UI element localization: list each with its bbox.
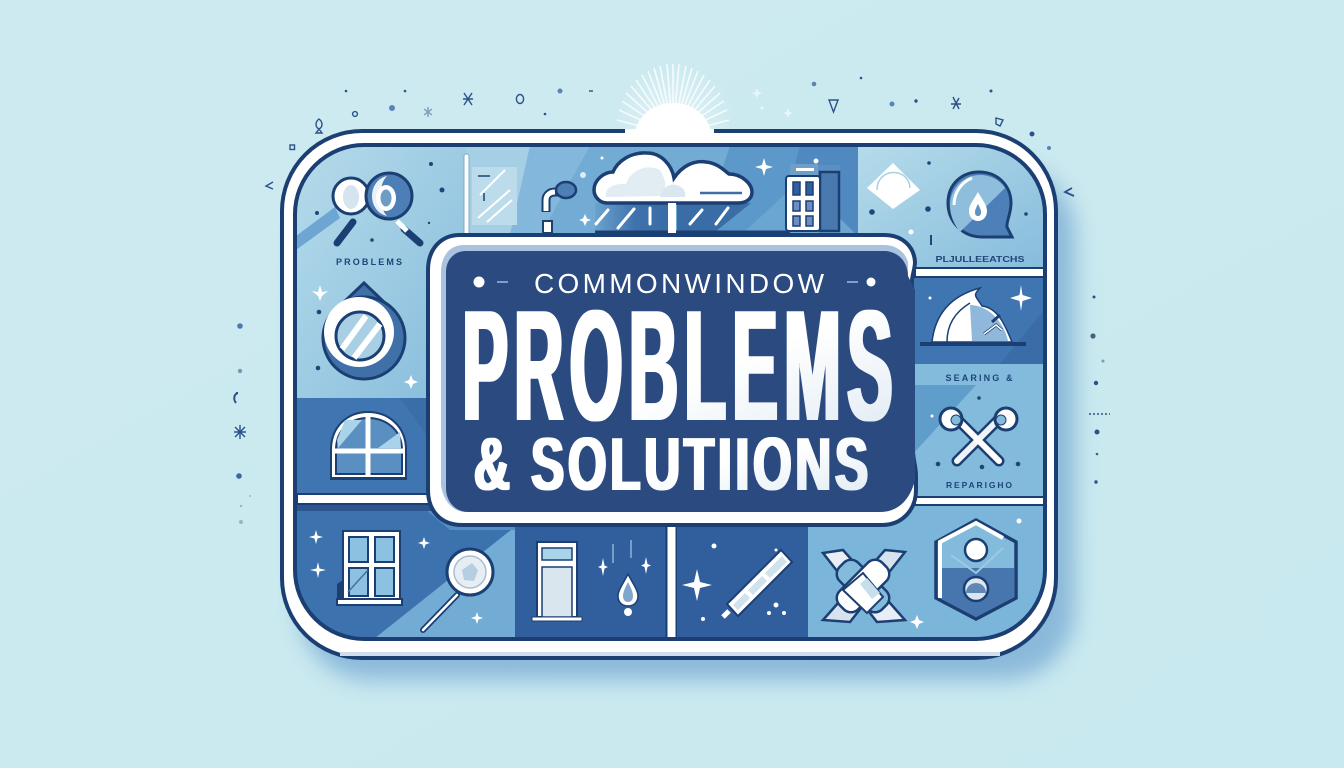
icon: crossed bandage — [823, 550, 905, 622]
icon: sun seal — [867, 163, 920, 209]
title: problems: PROBLEMS — [462, 277, 893, 454]
icon: round mirror — [323, 283, 405, 379]
panel: top left — [296, 146, 466, 398]
icon: speech bubble with drop — [948, 172, 1012, 237]
sun burst — [611, 63, 735, 187]
panel: middle left — [296, 398, 430, 495]
panel: top centre — [466, 146, 858, 236]
panel: top right — [858, 146, 1044, 268]
plaque border — [428, 235, 916, 525]
label: problems: PROBLEMS — [336, 257, 402, 267]
panel: bottom left — [296, 505, 516, 638]
icon: building — [786, 158, 840, 231]
panel: bottom middle — [515, 527, 666, 637]
icon: large magnifier — [423, 549, 493, 630]
divider: right upper — [915, 268, 1045, 277]
icon: dome — [920, 288, 1026, 346]
icon: door — [532, 542, 582, 621]
label: plumbing patches: PLJULLEEATCHS — [936, 254, 1025, 264]
outer frame — [282, 129, 1056, 658]
subtitle: COMMONWINDOW — [534, 268, 825, 299]
icon: cloud with rain — [579, 153, 790, 236]
icon: magnifiers — [333, 173, 420, 243]
icon: water drop with streaks — [613, 540, 638, 616]
divider: left — [297, 493, 426, 495]
panel: bottom right — [808, 505, 1044, 638]
scattered decoration marks — [234, 77, 1110, 524]
central plaque — [428, 235, 916, 525]
icon: square window — [337, 531, 402, 605]
plaque body — [446, 251, 915, 512]
panel: right middle — [910, 276, 1044, 364]
icon: bandage bar — [723, 550, 792, 617]
divider: right lower — [915, 497, 1045, 505]
label: searing: SEARING & — [946, 373, 1013, 383]
icon: broken glass pane — [464, 154, 517, 236]
frame shadow — [300, 165, 1075, 680]
label: repairing: REPARIGHO — [946, 480, 1012, 490]
inner frame outline — [295, 145, 1045, 639]
panel: right lower — [910, 364, 1044, 497]
white sparkles above frame — [752, 88, 793, 118]
panel: bottom middle right — [677, 527, 808, 637]
icon: sparkles — [309, 158, 1032, 629]
icon: crossed tools — [940, 408, 1017, 461]
icon: shield hexagon — [936, 520, 1016, 619]
inner panels — [296, 146, 1045, 638]
panel: bottom centre divider — [668, 527, 676, 637]
icon: arched window — [331, 412, 406, 479]
title: solutions: & SOLUTIIONS — [474, 423, 868, 507]
icon: pipe — [543, 182, 576, 233]
dark dots — [315, 161, 1028, 469]
subtitle ornaments — [474, 276, 876, 288]
